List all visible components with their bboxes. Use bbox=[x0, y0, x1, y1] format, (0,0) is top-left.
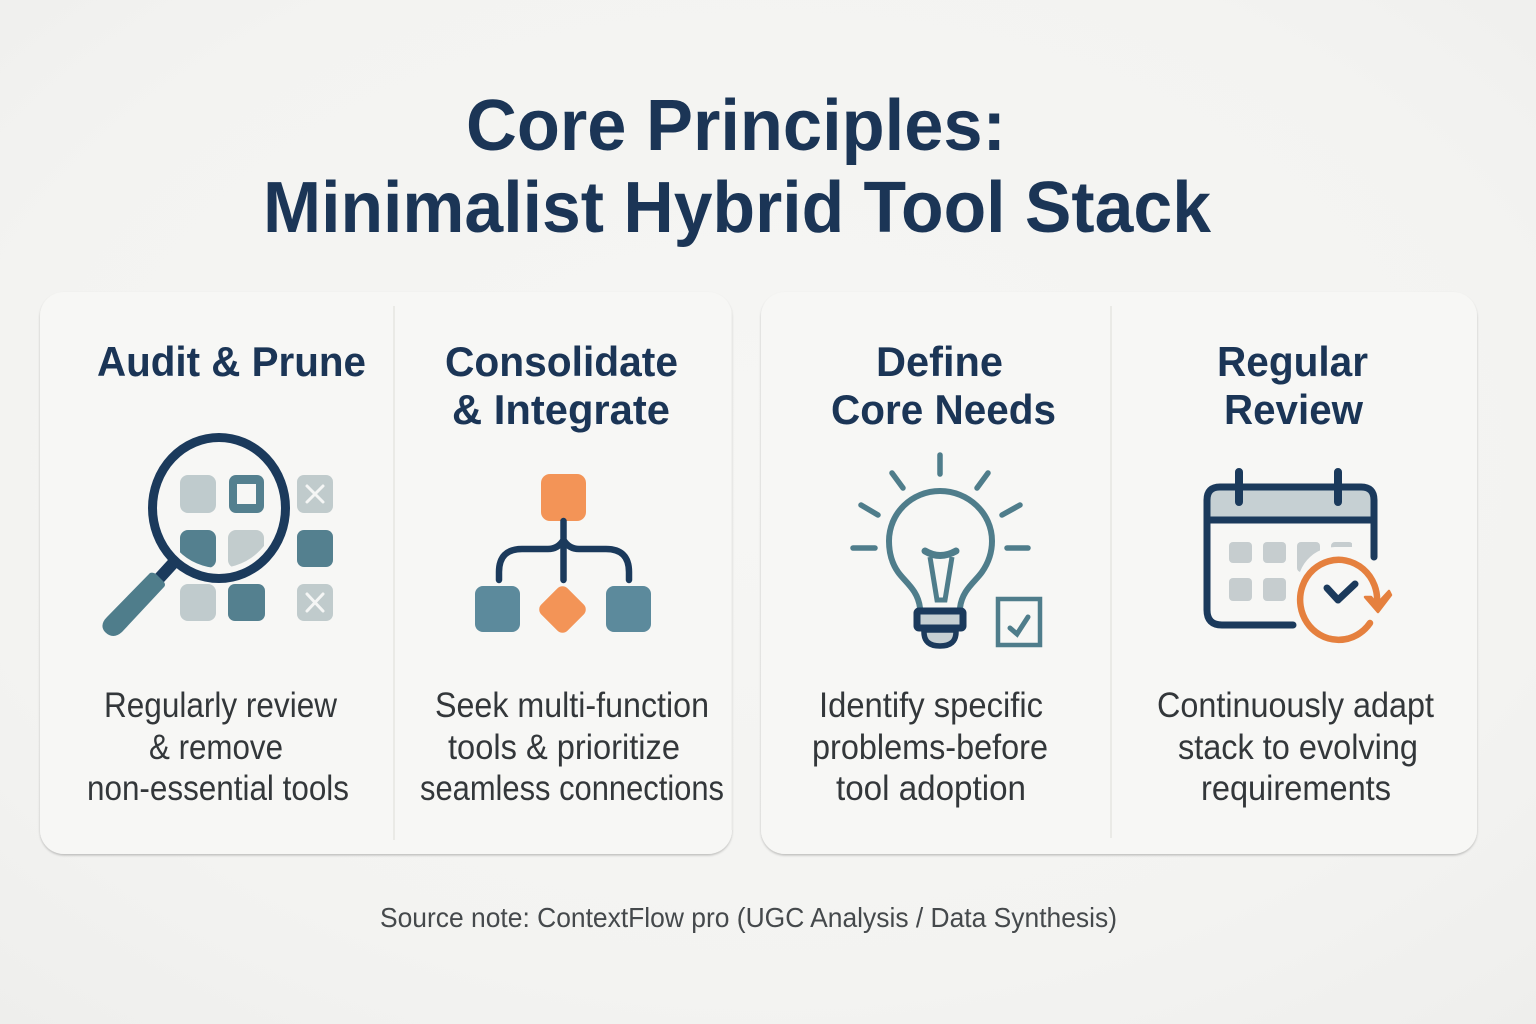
icon: calendar with review cycle bbox=[1207, 472, 1391, 640]
text: Regular Review description: Continuously adapt bbox=[1157, 686, 1434, 725]
text: Consolidate description: Seek multi-function bbox=[435, 686, 709, 725]
text: Audit & Prune description bbox=[87, 686, 349, 808]
title bbox=[263, 86, 1212, 248]
text: Audit & Prune description: & remove bbox=[149, 728, 283, 767]
heading: Define Core Needs: Core Needs bbox=[831, 386, 1056, 433]
source note: Source note: ContextFlow pro (UGC Analysis / Data Synthesis) bbox=[380, 902, 1117, 933]
heading: Consolidate & Integrate: Consolidate bbox=[445, 338, 678, 385]
text: Regular Review description: stack to evolving bbox=[1178, 728, 1418, 767]
panel: right card bbox=[761, 292, 1477, 854]
heading: Regular Review bbox=[1217, 338, 1368, 433]
icon: light bulb with checkbox bbox=[853, 455, 1040, 646]
text: Consolidate description bbox=[420, 686, 724, 808]
text: Audit & Prune description: Regularly review bbox=[104, 686, 338, 725]
icon: magnifying glass over tool grid bbox=[102, 438, 333, 636]
title: Core Principles: bbox=[466, 86, 1006, 166]
text: Define Core Needs description: Identify specific bbox=[819, 686, 1043, 725]
heading: Consolidate & Integrate: & Integrate bbox=[452, 386, 670, 433]
heading: Regular Review: Regular bbox=[1217, 338, 1368, 385]
icon: hierarchy diagram bbox=[475, 474, 651, 636]
text: Consolidate description: seamless connections bbox=[420, 769, 724, 808]
heading: Define Core Needs: Define bbox=[876, 338, 1003, 385]
heading: Regular Review: Review bbox=[1224, 386, 1363, 433]
heading: Define Core Needs bbox=[831, 338, 1056, 433]
text: Regular Review description bbox=[1157, 686, 1434, 808]
text: Audit & Prune description: non-essential tools bbox=[87, 769, 349, 808]
text: Define Core Needs description: problems-before bbox=[812, 728, 1048, 767]
text: Consolidate description: tools & prioritize bbox=[448, 728, 680, 767]
text: Define Core Needs description: tool adoption bbox=[836, 769, 1026, 808]
heading: Audit & Prune: Audit & Prune bbox=[97, 338, 366, 385]
text: Define Core Needs description bbox=[812, 686, 1048, 808]
title: Minimalist Hybrid Tool Stack bbox=[263, 168, 1212, 248]
panel: left card bbox=[40, 292, 732, 854]
heading: Consolidate & Integrate bbox=[445, 338, 678, 433]
text: Regular Review description: requirements bbox=[1201, 769, 1391, 808]
